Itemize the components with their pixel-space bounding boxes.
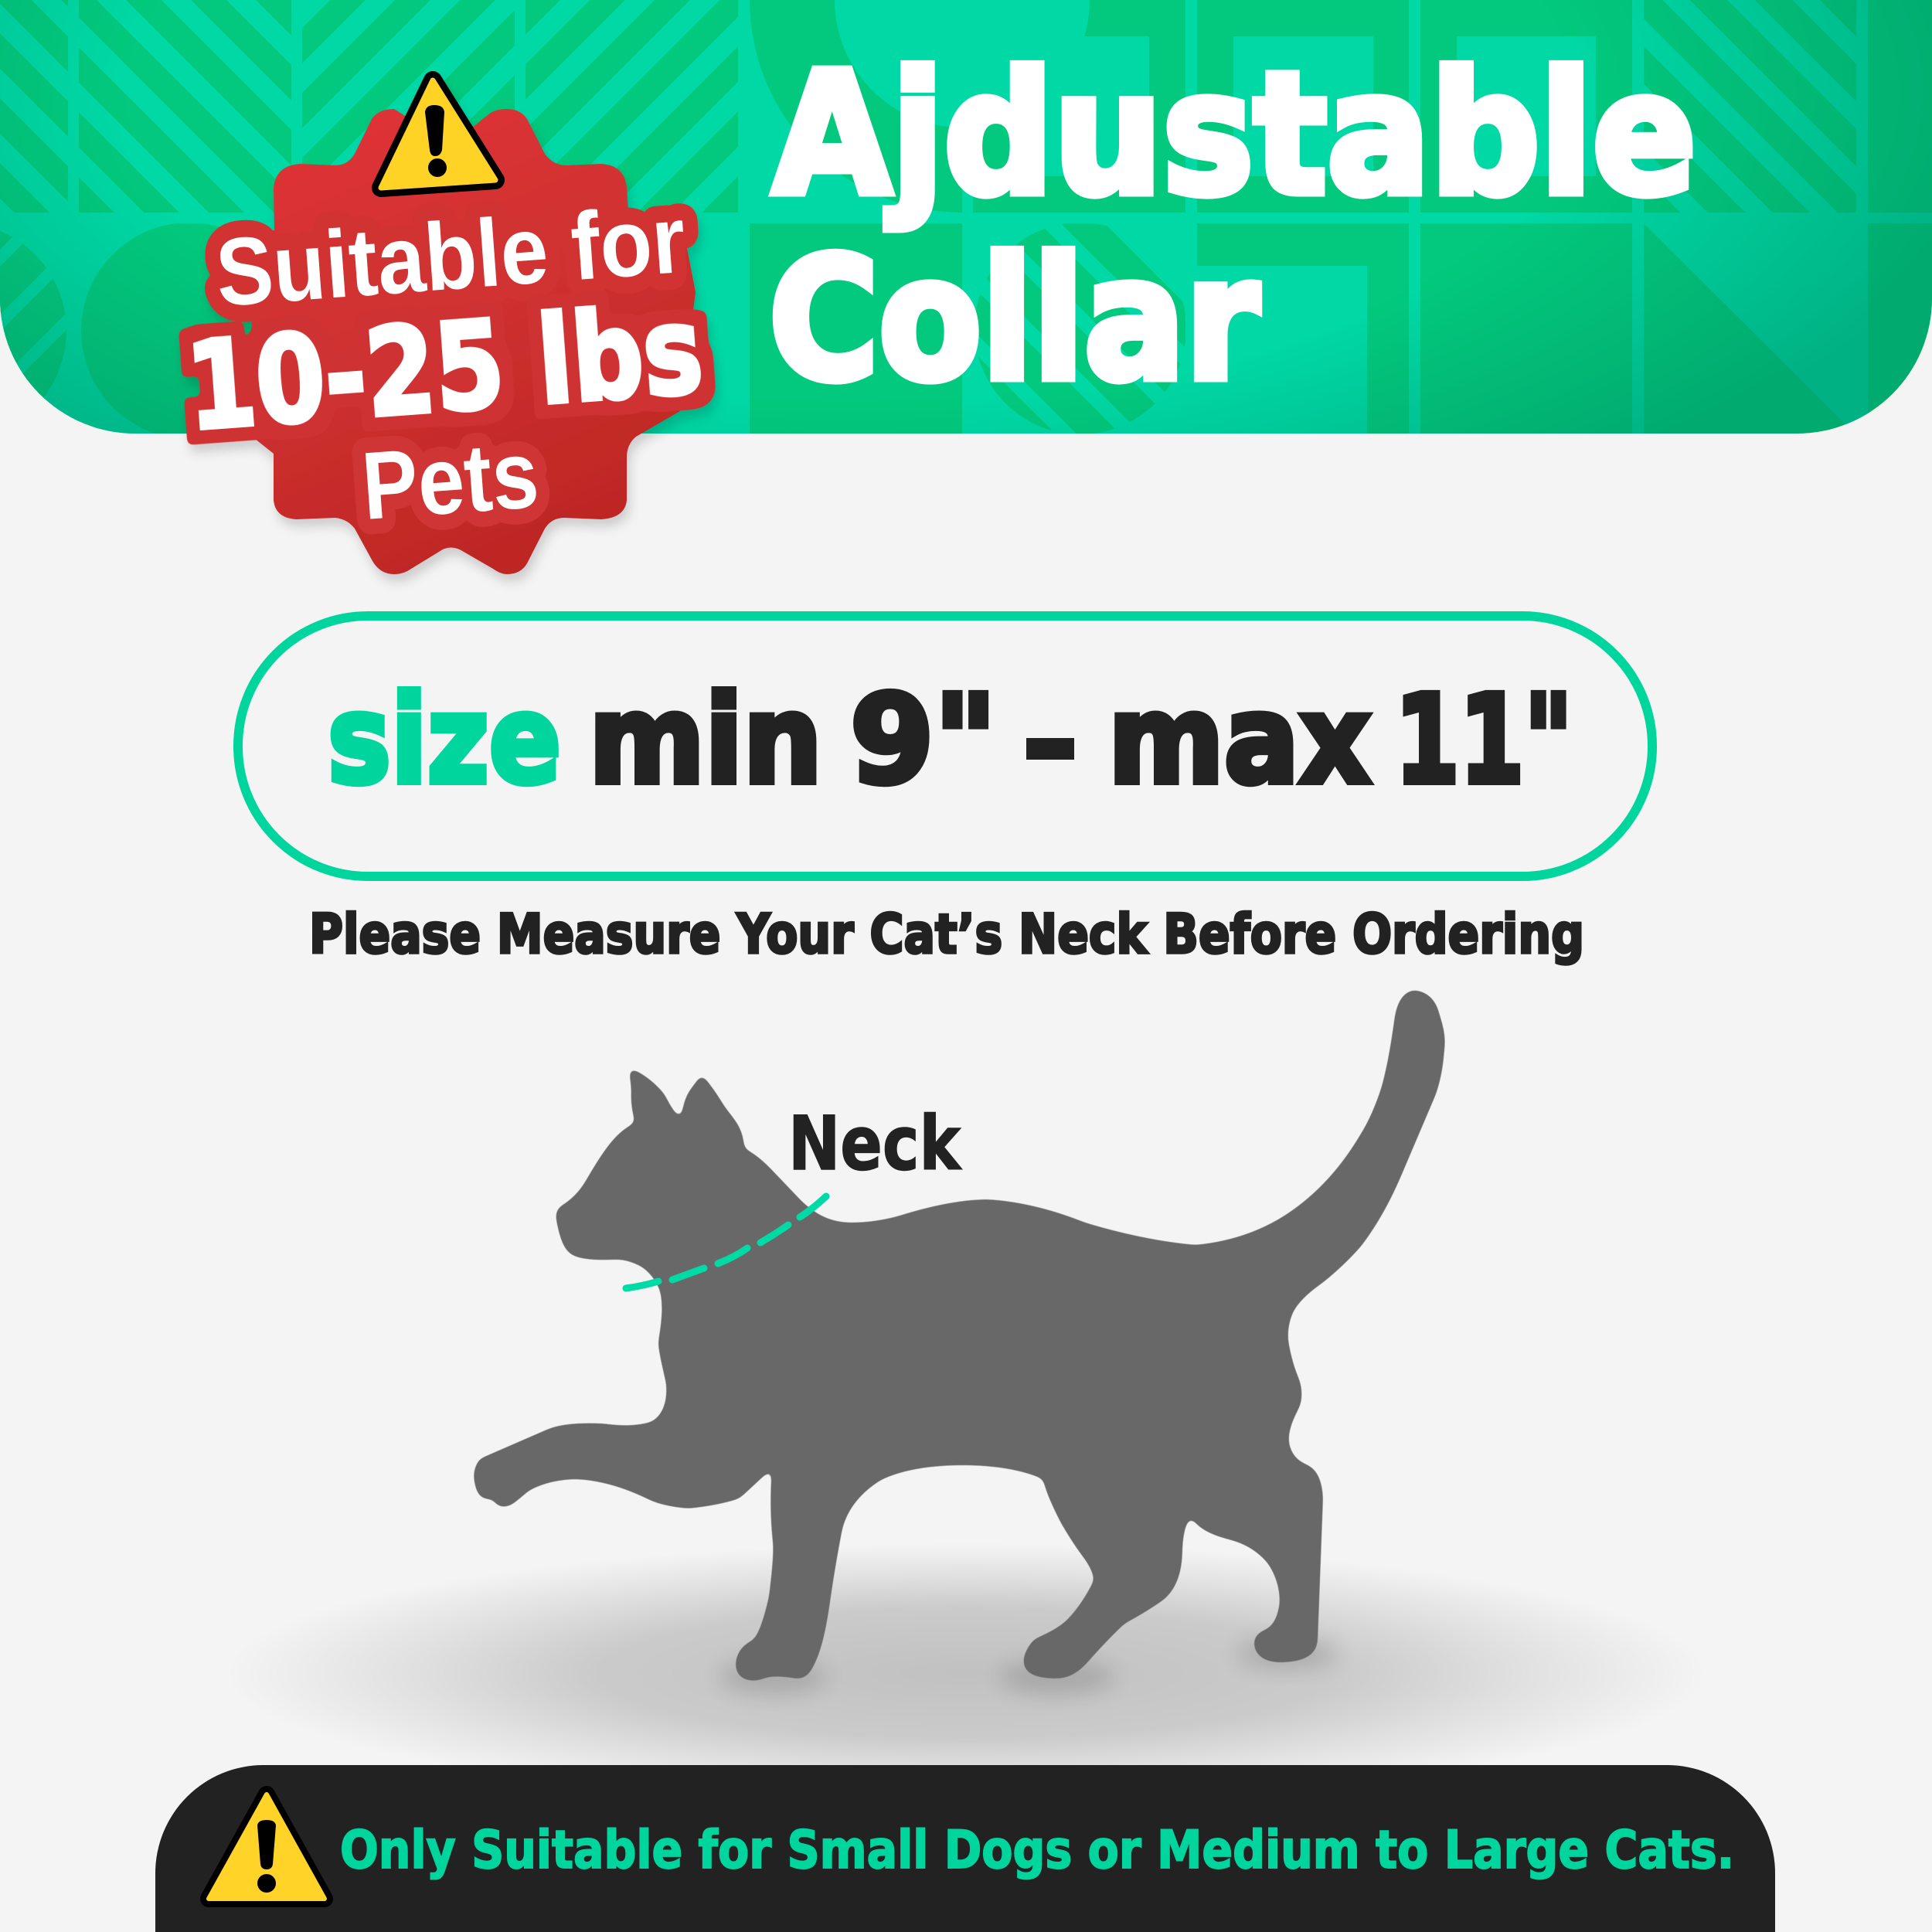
neck measuring dashes xyxy=(626,1196,826,1288)
title line 2: Collar xyxy=(769,223,1259,418)
value: 9 inches: 9" xyxy=(850,669,997,811)
warning panel xyxy=(155,1765,1775,1932)
size capsule xyxy=(238,616,1652,876)
warning text: Only Suitable for Small Dogs or Medium to Large Cats. xyxy=(340,1820,1734,1881)
cat silhouette xyxy=(474,990,1445,1681)
warning icon xyxy=(381,80,495,188)
title xyxy=(769,37,1696,418)
badge starburst xyxy=(247,109,696,574)
title line 1: Ajdustable xyxy=(773,37,1696,233)
warning icon xyxy=(209,1794,325,1899)
badge line: 10-25 lbs: 10-25 lbs xyxy=(182,279,707,457)
dash xyxy=(1026,738,1074,760)
measure instruction: Please Measure Your Cat’s Neck Before Ordering xyxy=(309,903,1584,966)
badge line: Pets: Pets xyxy=(359,421,542,540)
red weight badge xyxy=(182,80,707,574)
badge line: Suitable for: Suitable for xyxy=(213,186,689,327)
word: size: size xyxy=(328,669,561,811)
header banner xyxy=(0,0,1932,439)
ground shadow xyxy=(224,1543,1708,1803)
word: min: min xyxy=(589,669,822,811)
value: 11 inches: 11" xyxy=(1395,669,1573,811)
size text xyxy=(328,669,1573,811)
word: max: max xyxy=(1108,669,1371,811)
neck label: Neck xyxy=(788,1100,962,1187)
